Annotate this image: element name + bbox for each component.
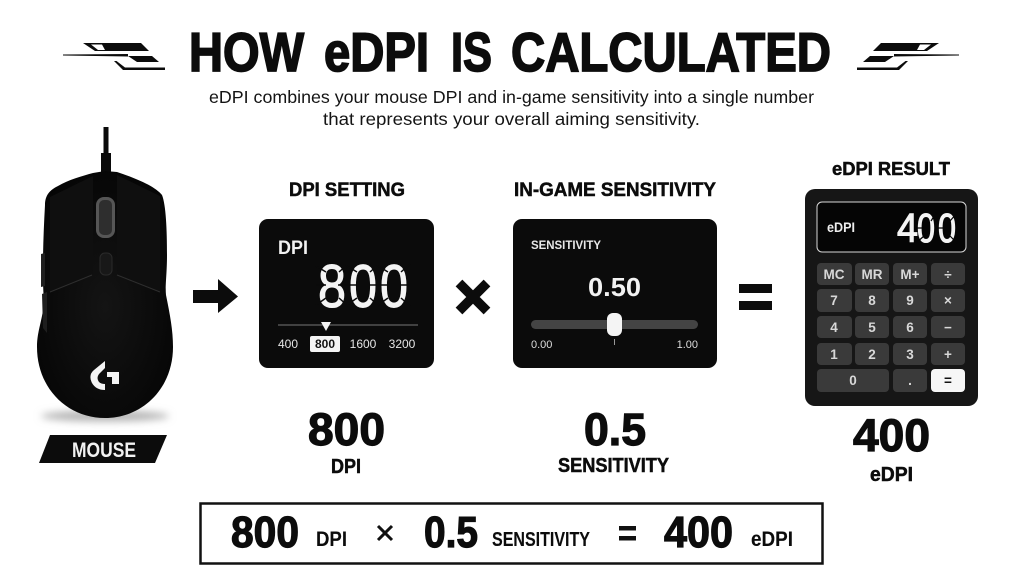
panel: sensitivity slider: 0.50 xyxy=(588,272,641,302)
subtitle xyxy=(209,87,814,129)
title: CALCULATED xyxy=(511,21,831,83)
formula box xyxy=(200,504,822,564)
calculator keypad: 4 xyxy=(830,320,838,335)
panel: DPI display: 1600 xyxy=(350,337,377,351)
value: eDPI: 400 xyxy=(853,410,930,461)
calculator keypad: − xyxy=(944,320,952,335)
panel: sensitivity slider: 1.00 xyxy=(677,339,698,351)
calculator keypad: 7 xyxy=(830,293,838,308)
panel: DPI display: 800 xyxy=(315,337,335,351)
calculator keypad: MC xyxy=(824,267,845,282)
formula box: 0.5 xyxy=(424,508,478,557)
multiply sign xyxy=(459,283,487,311)
calculator display xyxy=(817,202,966,252)
calculator keypad: 0 xyxy=(849,373,857,388)
title: HOW xyxy=(189,21,304,83)
calculator keypad: 2 xyxy=(868,347,876,362)
calculator keypad xyxy=(817,263,965,392)
formula box: SENSITIVITY xyxy=(492,529,591,551)
calculator keypad: × xyxy=(944,293,952,308)
DPI readout xyxy=(316,253,410,320)
calculator display: eDPI xyxy=(827,219,855,235)
calculator keypad: = xyxy=(944,373,952,388)
calculator display: 0 xyxy=(917,205,935,251)
formula box: DPI xyxy=(316,528,347,551)
formula box: 800 xyxy=(231,508,299,557)
calculator keypad: 3 xyxy=(906,347,914,362)
calculator keypad: . xyxy=(908,373,912,388)
DPI readout: 8 xyxy=(318,253,346,320)
calculator keypad: 5 xyxy=(868,320,876,335)
calculator display: 0 xyxy=(938,205,956,251)
value: DPI: DPI xyxy=(331,456,361,478)
calculator keypad: 1 xyxy=(830,347,838,362)
title: IS xyxy=(451,21,492,83)
value: sensitivity xyxy=(558,404,670,477)
DPI readout: 0 xyxy=(380,253,408,320)
title xyxy=(189,21,831,83)
panel: DPI display xyxy=(259,219,434,368)
value: eDPI: eDPI xyxy=(870,464,913,486)
heading: in-game sensitivity: IN-GAME SENSITIVITY xyxy=(514,179,716,201)
decoration: right speed wing xyxy=(857,43,959,70)
formula box: eDPI xyxy=(751,528,793,551)
panel: DPI display: DPI xyxy=(278,238,308,259)
DPI readout: 0 xyxy=(349,253,377,320)
value: sensitivity: 0.5 xyxy=(584,404,646,455)
calculator keypad: + xyxy=(944,347,952,362)
mouse label: MOUSE xyxy=(72,439,136,462)
calculator keypad: M+ xyxy=(900,267,920,282)
panel: DPI display: 400 xyxy=(278,337,298,351)
value: DPI: 800 xyxy=(308,404,385,455)
calculator display: 4 xyxy=(897,205,918,251)
title: eDPI xyxy=(324,21,429,83)
value: eDPI xyxy=(853,410,930,486)
calculator keypad: 6 xyxy=(906,320,914,335)
calculator keypad: 9 xyxy=(906,293,914,308)
panel: sensitivity slider: SENSITIVITY xyxy=(531,238,601,252)
icon: gaming mouse xyxy=(37,127,173,422)
subtitle: that represents your overall aiming sensitivity. xyxy=(323,109,700,129)
calculator keypad: MR xyxy=(862,267,883,282)
decoration: left speed wing xyxy=(63,43,165,70)
heading: eDPI result: eDPI RESULT xyxy=(832,158,951,179)
calculator keypad: ÷ xyxy=(944,267,952,282)
panel: sensitivity slider: 0.00 xyxy=(531,339,552,351)
arrow xyxy=(193,279,238,313)
value: DPI xyxy=(308,404,385,478)
heading: DPI setting: DPI SETTING xyxy=(289,179,405,201)
mouse label xyxy=(39,435,167,463)
equals sign xyxy=(739,284,772,310)
panel: calculator xyxy=(805,189,978,406)
value: sensitivity: SENSITIVITY xyxy=(558,455,670,477)
icon: G logo xyxy=(90,361,119,390)
panel: sensitivity slider xyxy=(513,219,717,368)
calculator keypad: 8 xyxy=(868,293,876,308)
subtitle: eDPI combines your mouse DPI and in-game sensitivity into a single number xyxy=(209,87,814,107)
panel: DPI display: 3200 xyxy=(389,337,416,351)
formula box: 400 xyxy=(664,508,733,557)
